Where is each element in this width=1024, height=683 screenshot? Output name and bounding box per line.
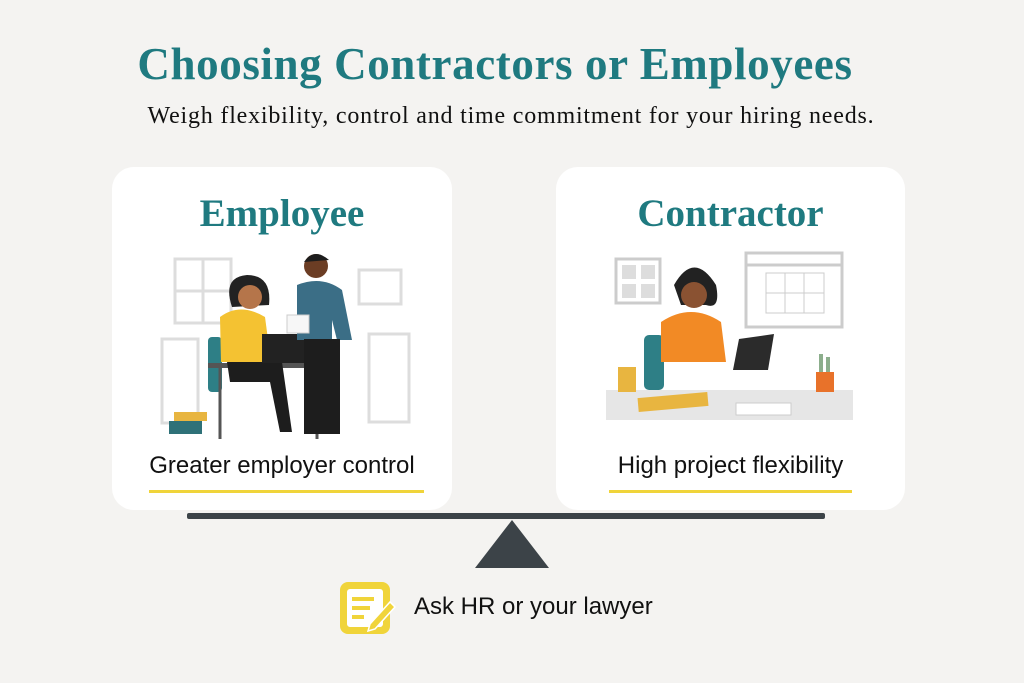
balance beam [187, 513, 825, 519]
heading: contractor: Contractor [637, 192, 824, 235]
title: Choosing Contractors or Employees [137, 39, 853, 89]
underline [609, 490, 852, 493]
panel: employee [112, 167, 452, 510]
underline [149, 490, 424, 493]
subtitle: Weigh flexibility, control and time commitment for your hiring needs. [148, 103, 874, 129]
heading: employee: Employee [200, 192, 364, 235]
caption: contractor: High project flexibility [618, 452, 843, 479]
caption: employee: Greater employer control [149, 452, 415, 479]
text: Ask HR or your lawyer [414, 593, 653, 620]
callout: ask HR [340, 582, 653, 634]
fulcrum [475, 520, 549, 568]
icon: notepad [340, 582, 396, 634]
panel: contractor [556, 167, 905, 510]
illustration: employee [160, 254, 410, 439]
illustration: contractor [606, 252, 853, 420]
